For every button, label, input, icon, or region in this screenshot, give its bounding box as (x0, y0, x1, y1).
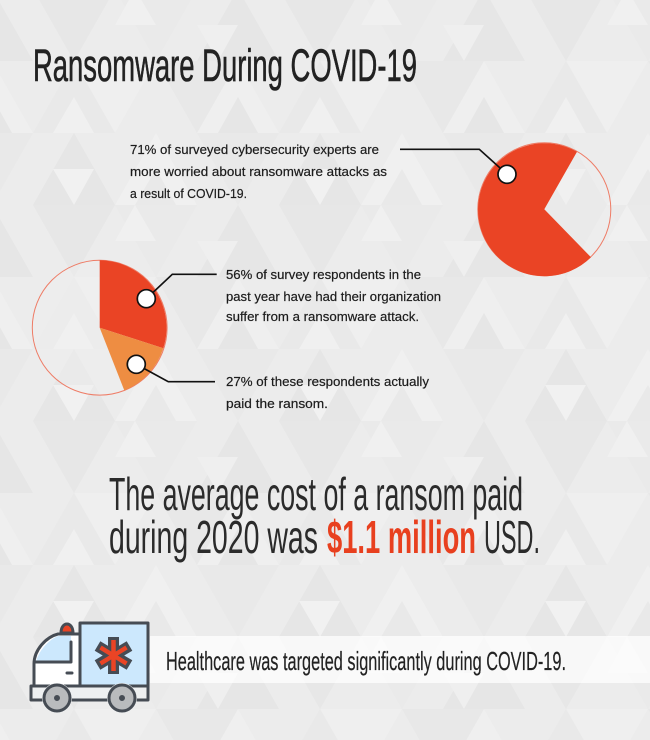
statement: average ransom cost: USD. (484, 511, 540, 563)
text: 71 percent: 71% of surveyed cybersecurity experts are (130, 142, 379, 157)
text: 71 percent: a result of COVID-19. (130, 186, 247, 201)
floor band (31, 686, 148, 700)
text: 71 percent (130, 142, 388, 201)
ambulance box (80, 623, 148, 686)
text: 56 percent (226, 267, 441, 324)
text: 56 percent: suffer from a ransomware attack. (226, 309, 419, 324)
cab window (36, 636, 71, 662)
pie chart: 56 and 27 percent (32, 260, 167, 395)
icon: ambulance (31, 623, 148, 713)
statement: average ransom cost (109, 468, 540, 563)
window frame (36, 642, 71, 662)
text: 56 percent: 56% of survey respondents in the (226, 267, 421, 282)
callout line and marker: 27 percent (127, 355, 215, 382)
siren (61, 624, 73, 633)
callout line and marker (400, 149, 516, 183)
pie chart: 71 percent (478, 143, 611, 276)
healthcare banner (150, 636, 650, 683)
star of life (98, 637, 130, 674)
callout line and marker: 56 percent (137, 274, 217, 308)
statement: average ransom cost: during 2020 was (109, 511, 318, 563)
door handle (67, 672, 72, 674)
text: 71 percent: more worried about ransomware attacks as (130, 164, 388, 179)
text: 27 percent: paid the ransom. (226, 396, 328, 411)
title: Ransomware During COVID-19 (33, 40, 417, 91)
wheels (42, 683, 72, 713)
ambulance cab (34, 634, 80, 686)
text: 56 percent: past year have had their organization (226, 289, 441, 304)
panel: 56% and 27% pie chart with callouts (32, 260, 441, 411)
panel: 71% pie chart with callout (130, 142, 611, 276)
text: 27 percent (226, 374, 429, 411)
statement: average ransom cost: $1.1 million (327, 511, 476, 563)
text: 27 percent: 27% of these respondents actually (226, 374, 429, 389)
